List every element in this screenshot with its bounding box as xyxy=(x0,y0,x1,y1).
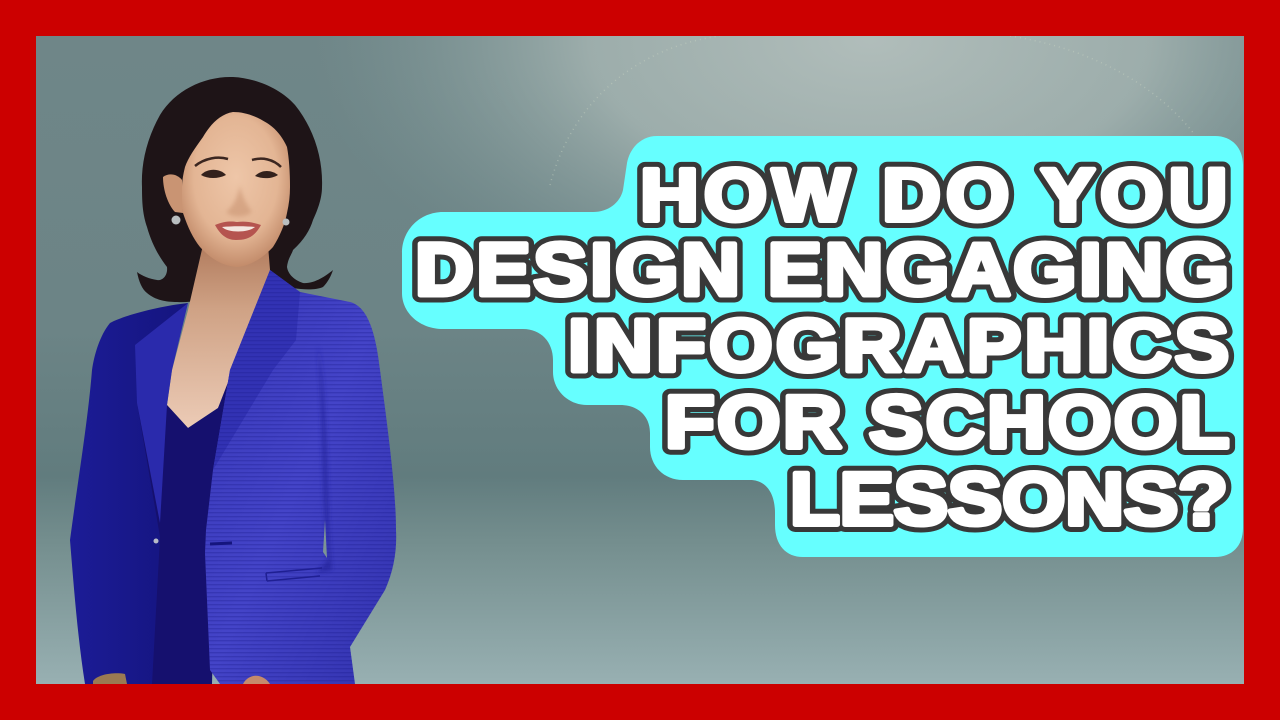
sleeve seam shadow xyxy=(317,345,332,573)
title outline xyxy=(415,155,1229,541)
title fill xyxy=(415,155,1229,541)
title fill: INFOGRAPHICS xyxy=(568,305,1229,387)
title fill: HOW DO YOU xyxy=(640,155,1227,237)
nose shadow xyxy=(226,185,252,216)
inner top xyxy=(137,372,232,684)
title outline: INFOGRAPHICS xyxy=(568,305,1229,387)
title fill: FOR SCHOOL xyxy=(665,382,1229,464)
jacket right xyxy=(205,270,396,684)
title fill: DESIGN ENGAGING xyxy=(415,229,1229,311)
title outline: FOR SCHOOL xyxy=(665,382,1229,464)
person xyxy=(70,77,396,684)
title outline: HOW DO YOU xyxy=(640,155,1227,237)
jacket left xyxy=(70,303,188,684)
hand xyxy=(243,676,270,684)
neck and chest xyxy=(167,245,270,428)
title outline: DESIGN ENGAGING xyxy=(415,229,1229,311)
ear xyxy=(163,174,183,213)
eyes xyxy=(195,158,281,178)
title outline: LESSONS? xyxy=(790,459,1228,541)
ribbed fabric texture xyxy=(205,270,396,684)
earrings xyxy=(172,216,180,224)
watch xyxy=(93,673,127,684)
mouth xyxy=(215,221,261,240)
cyan title blob xyxy=(402,136,1243,557)
right lapel xyxy=(207,270,300,500)
left lapel xyxy=(135,303,188,523)
hair back xyxy=(137,77,333,302)
title fill: LESSONS? xyxy=(790,459,1228,541)
jacket button and pockets xyxy=(154,520,327,581)
title xyxy=(415,155,1229,541)
face xyxy=(182,112,290,267)
